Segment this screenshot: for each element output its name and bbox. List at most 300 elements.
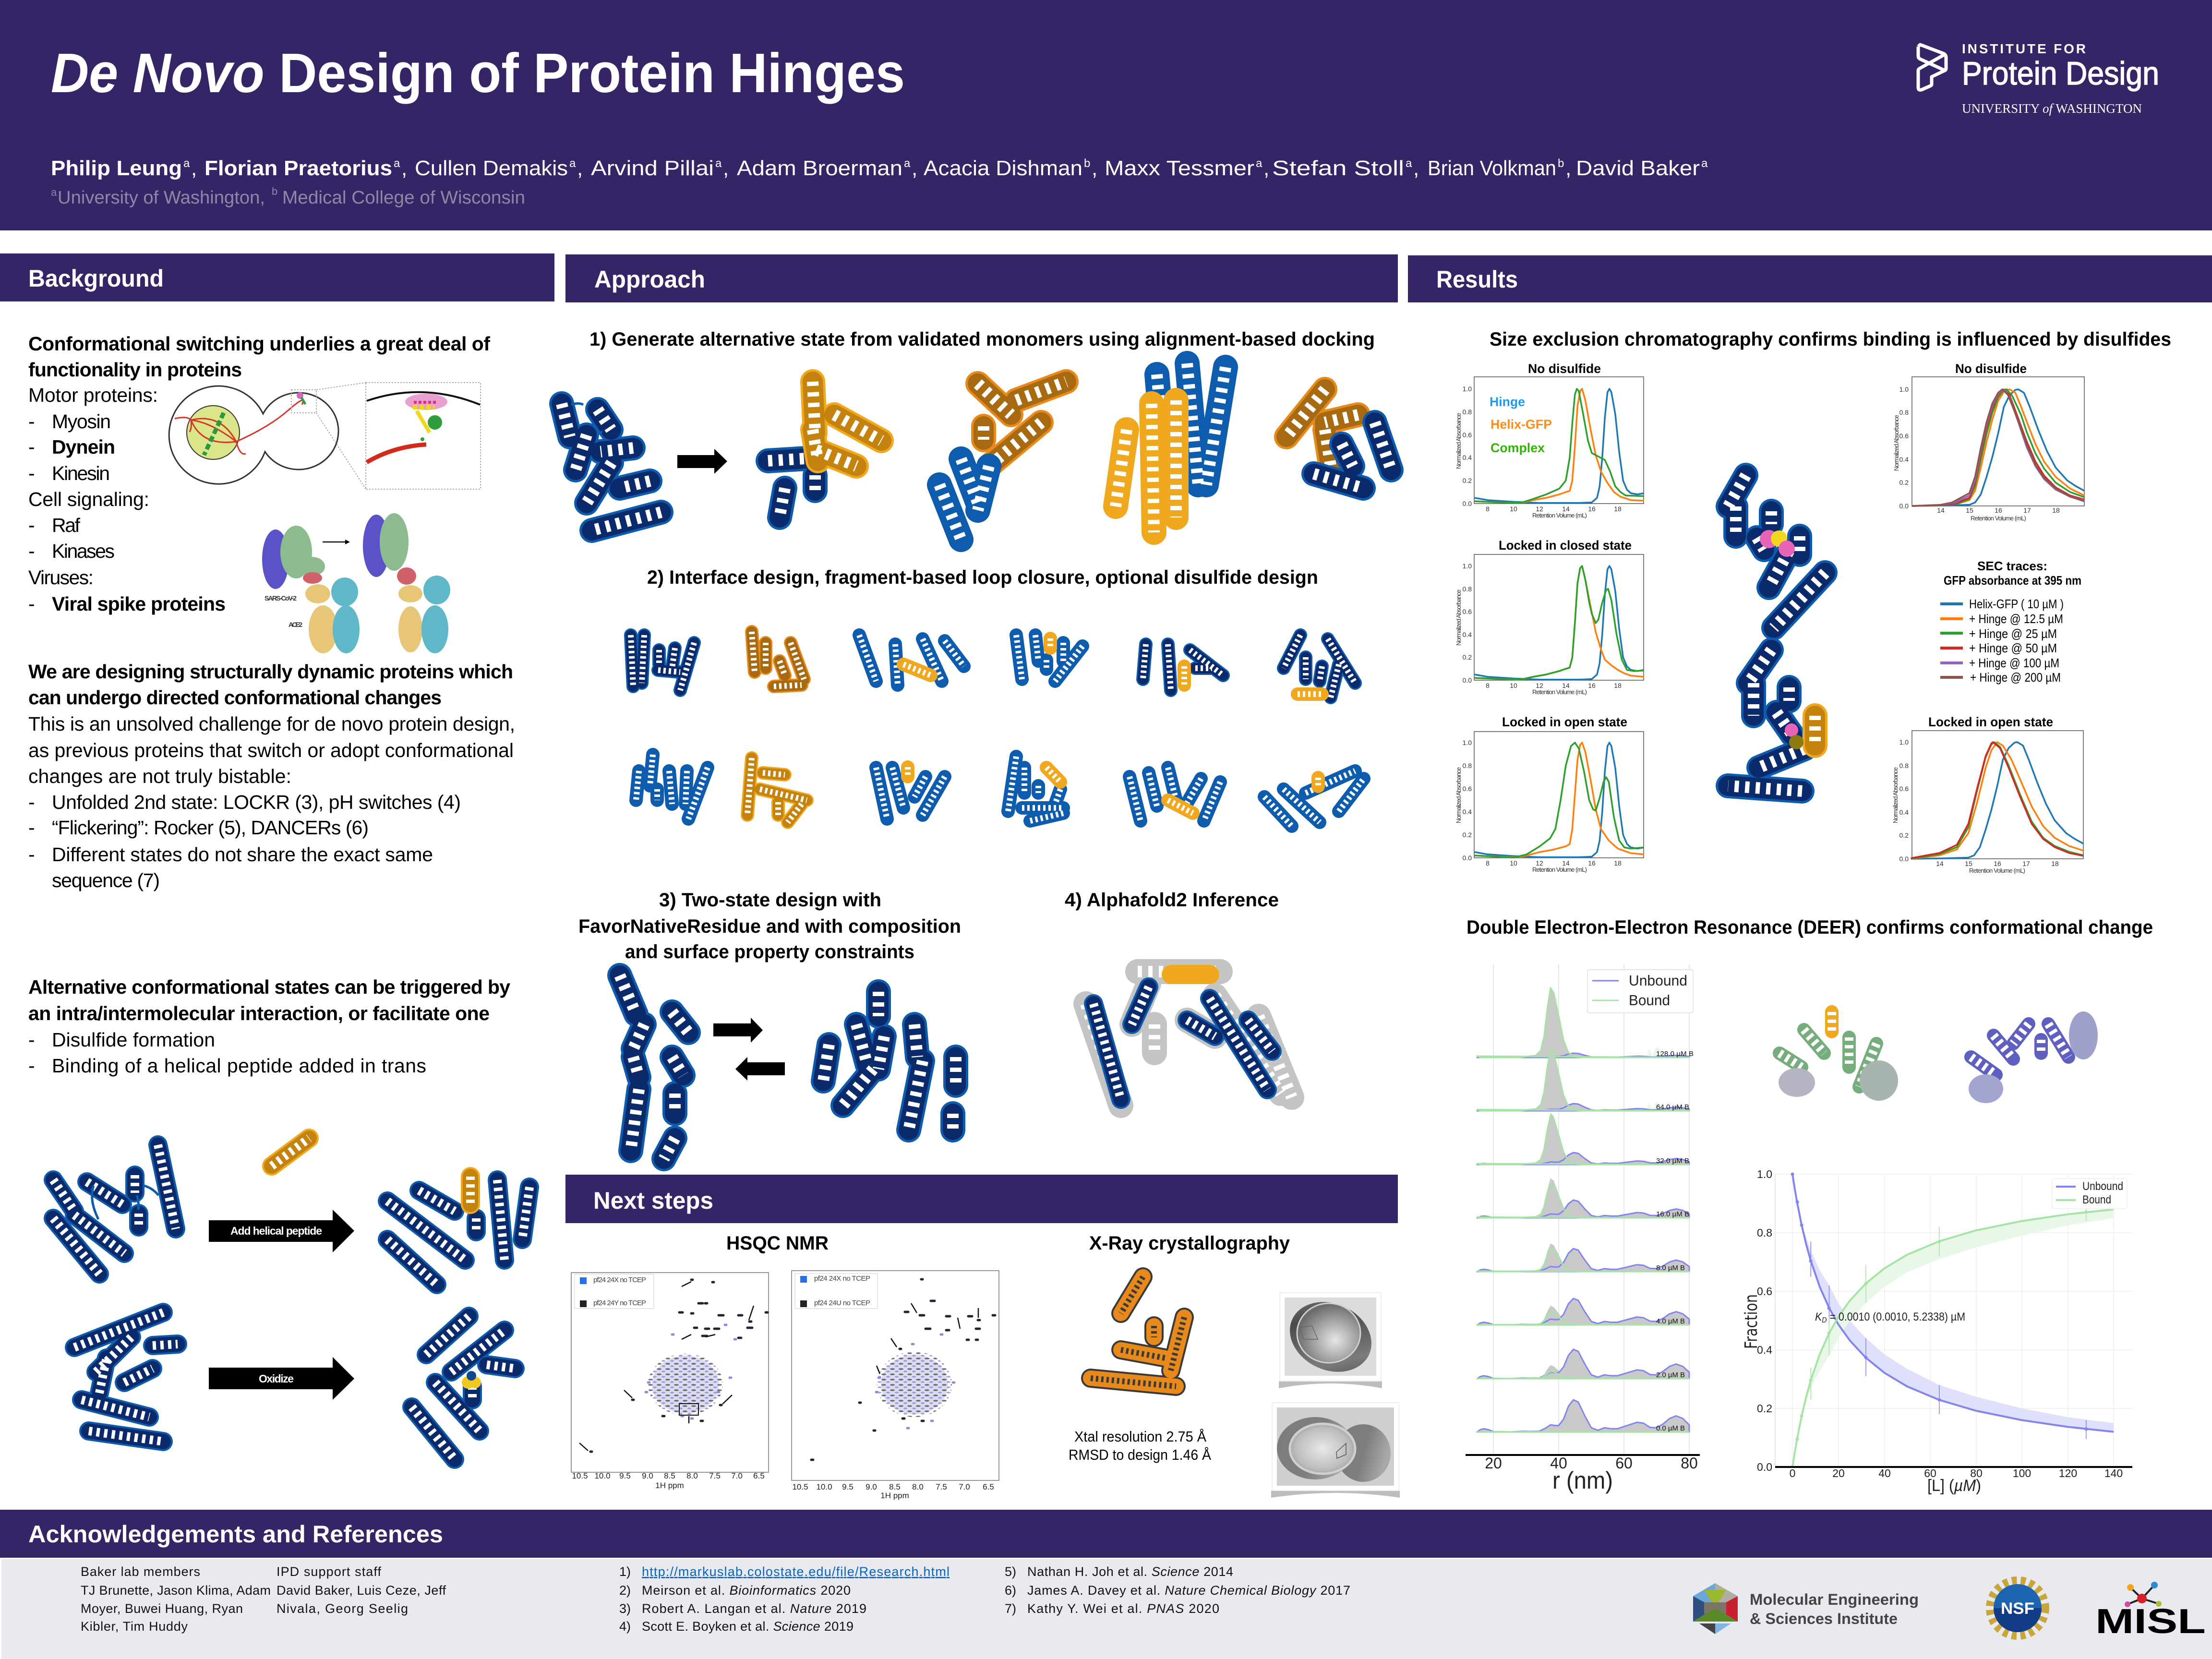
- text: acknowledgements: David Baker, Luis Ceze, Jeff: [276, 1583, 446, 1598]
- heading: step 3: FavorNativeResidue and with composition: [578, 916, 961, 937]
- chart: SEC traces no disulfide: 0.6: [1899, 432, 1909, 440]
- text: references 5-7: 7): [1005, 1601, 1016, 1616]
- text block: alternative conformational states: an intra/intermolecular interaction, or facilitate one: [28, 1002, 490, 1024]
- heading: X-ray crystallography: X-Ray crystallography: [1089, 1233, 1290, 1254]
- authors: b: [1558, 157, 1564, 170]
- logo: Institute for Protein Design: Protein Design: [1962, 55, 2159, 92]
- text block: structurally dynamic proteins: Unfolded 2nd state: LOCKR (3), pH switches (4): [52, 791, 461, 813]
- text block: alternative conformational states: -: [28, 1029, 35, 1051]
- section bar: Results: Results: [1436, 266, 1518, 293]
- chart: HSQC spectrum 1: 7.5: [709, 1471, 721, 1480]
- chart: DEER distance distributions: 40: [1550, 1455, 1567, 1472]
- text block: structurally dynamic proteins: -: [28, 791, 35, 813]
- chart: HSQC spectrum 2: 1H ppm: [880, 1491, 909, 1500]
- chart: SEC locked in open state: Retention Volume (mL): [1532, 866, 1587, 873]
- chart: SEC no disulfide: Retention Volume (mL): [1532, 512, 1587, 519]
- text block: conformational switching: Raf: [52, 514, 81, 536]
- chart: SEC locked in open state: [1455, 715, 1644, 873]
- chart: SEC locked in closed state: Normalized Absorbance: [1455, 589, 1462, 646]
- chart: SEC no disulfide: 14: [1562, 505, 1570, 513]
- chart: binding curve: 0.0: [1757, 1461, 1772, 1473]
- chart: SEC traces locked in open state: Locked in open state: [1928, 715, 2053, 729]
- text: acknowledgements: Nivala, Georg Seelig: [276, 1601, 408, 1616]
- protein row 2: design 11: [1130, 768, 1220, 821]
- chart: SEC no disulfide: 18: [1614, 505, 1622, 513]
- text: references 1-4: 4): [619, 1619, 631, 1634]
- chart: binding curve: 60: [1924, 1467, 1936, 1479]
- authors: ,: [1263, 156, 1269, 180]
- text block: structurally dynamic proteins: can undergo directed conformational changes: [28, 686, 442, 709]
- chart: SEC no disulfide: 10: [1510, 505, 1517, 513]
- protein: closed state: [823, 992, 956, 1130]
- protein row 1: design 6: [1284, 635, 1355, 697]
- section bar: Next steps: [565, 1175, 1398, 1223]
- chart: SEC traces no disulfide: 14: [1937, 506, 1945, 514]
- text: references 5-7: 5): [1005, 1564, 1016, 1579]
- logo: MISL: MISL: [2095, 1602, 2206, 1641]
- figure: dividing cell with dynein inset: [169, 383, 481, 489]
- chart: SEC traces no disulfide: 0.8: [1899, 409, 1909, 416]
- text block: conformational switching: Viral spike proteins: [52, 593, 226, 615]
- heading: DEER: Double Electron-Electron Resonance (DEER) confirms conformational change: [1467, 917, 2153, 938]
- affiliations: [51, 185, 525, 208]
- chart: SEC locked in closed state: 0.8: [1463, 585, 1472, 593]
- legend: SEC traces: SEC traces:: [1977, 559, 2047, 573]
- protein row 1: design 5: [1143, 644, 1223, 690]
- chart: SEC no disulfide: Hinge: [1490, 395, 1525, 409]
- text block: alternative conformational states: Disulfide formation: [52, 1029, 215, 1051]
- protein: peptide bound hinge: [387, 1177, 529, 1285]
- authors: ,: [1092, 156, 1097, 180]
- chart: HSQC spectrum 2: 7.5: [936, 1482, 947, 1491]
- authors: ,: [577, 156, 583, 180]
- logo: NSF: NSF: [2001, 1599, 2034, 1618]
- authors: Brian Volkman: [1428, 156, 1556, 180]
- chart: SEC no disulfide: 8: [1486, 505, 1490, 513]
- chart: HSQC spectrum 1: 8.5: [664, 1471, 675, 1480]
- chart: HSQC spectrum 1: pf24 24Y no TCEP: [593, 1299, 646, 1307]
- text: acknowledgements: IPD support staff: [276, 1564, 381, 1579]
- chart: binding curve: D: [1822, 1316, 1827, 1324]
- chart: DEER distance distributions: 8.0 µM B: [1656, 1264, 1685, 1272]
- chart: HSQC spectrum 1: [571, 1273, 769, 1490]
- text: references 5-7: 6): [1005, 1583, 1016, 1598]
- chart: DEER distance distributions: 2.0 µM B: [1656, 1371, 1685, 1379]
- protein row 1: design 3: [859, 635, 964, 685]
- authors: Philip Leung: [51, 156, 182, 180]
- chart: HSQC spectrum 2: 9.5: [842, 1482, 854, 1491]
- chart: SEC no disulfide: 12: [1536, 505, 1543, 513]
- chart: SEC locked in open state: 1.0: [1463, 739, 1472, 746]
- chart: SEC locked in open state: 0.4: [1463, 808, 1472, 816]
- chart: SEC traces locked in open state: 0.8: [1899, 762, 1909, 769]
- chart: SEC traces no disulfide: 16: [1995, 506, 2002, 514]
- text: references 5-7: Nathan H. Joh et al. Science 2014: [1027, 1564, 1233, 1579]
- chart: SEC locked in open state: Normalized Absorbance: [1455, 767, 1462, 823]
- image: crystal 1: [1278, 1289, 1383, 1388]
- logo: Institute for Protein Design: [1918, 41, 2159, 116]
- text: references 1-4: 3): [619, 1601, 631, 1616]
- protein: oxidized hinge with disulfide: [412, 1316, 515, 1459]
- text: crystal statistics: RMSD to design 1.46 Å: [1069, 1446, 1211, 1463]
- protein: docked 2: [939, 382, 1066, 540]
- text block: conformational switching: -: [28, 593, 35, 615]
- chart: binding curve: 120: [2059, 1467, 2077, 1479]
- section bar: Background: [0, 253, 554, 301]
- chart: SEC traces locked in open state: 0.0: [1899, 855, 1909, 863]
- legend: SEC traces: + Hinge @ 200 µM: [1970, 670, 2061, 685]
- section bar: Approach: Approach: [594, 266, 705, 293]
- chart: SEC traces locked in open state: Retention Volume (mL): [1969, 867, 2025, 874]
- affiliations: b: [272, 185, 277, 197]
- chart: HSQC spectrum 2: 10.5: [792, 1482, 808, 1491]
- chart: SEC locked in open state: 16: [1588, 859, 1596, 867]
- chart: SEC no disulfide: 0.0: [1463, 500, 1472, 507]
- heading: step 3: and surface property constraints: [625, 941, 914, 962]
- protein: unbound state with spin labels: [1969, 1011, 2098, 1103]
- heading: HSQC NMR: HSQC NMR: [726, 1233, 829, 1254]
- authors: ,: [191, 156, 197, 180]
- text: references 1-4: [619, 1564, 950, 1634]
- arrow: back: [735, 1057, 785, 1081]
- chart: SEC locked in open state: 8: [1486, 859, 1490, 867]
- chart: binding curve: 0: [1790, 1467, 1795, 1479]
- arrow: to docked state: [677, 449, 727, 474]
- protein row 1: design 4: [1016, 635, 1082, 681]
- text block: conformational switching: Kinesin: [52, 462, 110, 484]
- chart: DEER distance distributions: Unbound: [1629, 972, 1687, 989]
- text block: alternative conformational states: Alternative conformational states can be triggered by: [28, 976, 510, 998]
- text: references 5-7: Kathy Y. Wei et al. PNAS 2020: [1027, 1601, 1219, 1616]
- chart: SEC traces no disulfide: 1.0: [1899, 385, 1909, 393]
- legend: SEC traces: Helix-GFP ( 10 µM ): [1969, 597, 2064, 611]
- affiliations: University of Washington,: [58, 188, 265, 208]
- chart: SEC locked in closed state: 8: [1486, 682, 1490, 689]
- chart: SEC traces locked in open state: 17: [2022, 860, 2030, 867]
- arrow: oxidize: Oxidize: [259, 1372, 294, 1385]
- legend: SEC traces: + Hinge @ 25 µM: [1969, 626, 2057, 641]
- legend: SEC traces: GFP absorbance at 395 nm: [1944, 573, 2081, 588]
- text block: structurally dynamic proteins: -: [28, 843, 35, 866]
- logo: Institute for Protein Design: INSTITUTE FOR: [1962, 41, 2086, 56]
- chart: SEC locked in open state: 0.0: [1463, 854, 1472, 862]
- chart: HSQC spectrum 1: 9.0: [642, 1471, 653, 1480]
- chart: binding curve: [L] (µM): [1927, 1477, 1981, 1495]
- chart: SEC traces no disulfide: 0.4: [1899, 456, 1909, 463]
- chart: binding curve: Unbound: [2082, 1180, 2123, 1193]
- chart: SEC locked in closed state: [1455, 538, 1644, 696]
- chart: binding curve: 80: [1970, 1467, 1983, 1479]
- text block: structurally dynamic proteins: This is an unsolved challenge for de novo protein design,: [28, 713, 515, 735]
- authors: Cullen Demakis: [415, 156, 568, 180]
- chart: DEER distance distributions: 20: [1485, 1455, 1502, 1472]
- logo: NSF: [1991, 1581, 2044, 1635]
- chart: binding curve: [1742, 1168, 2132, 1495]
- chart: binding curve: = 0.0010 (0.0010, 5.2338) µM: [1827, 1310, 1965, 1323]
- chart: SEC locked in open state: 0.8: [1463, 762, 1472, 769]
- chart: SEC locked in closed state: 0.0: [1463, 676, 1472, 684]
- chart: SEC traces locked in open state: 0.2: [1899, 831, 1909, 839]
- text block: conformational switching: Kinases: [52, 540, 115, 562]
- chart: DEER distance distributions: 64.0 µM B: [1656, 1103, 1689, 1111]
- authors: a: [394, 157, 400, 170]
- chart: binding curve: 20: [1832, 1467, 1845, 1479]
- chart: binding curve: K: [1815, 1310, 1822, 1323]
- text block: structurally dynamic proteins: sequence (7): [52, 869, 160, 891]
- chart: SEC locked in closed state: 0.4: [1463, 631, 1472, 638]
- legend: SEC traces: + Hinge @ 12.5 µM: [1969, 612, 2063, 626]
- chart: SEC locked in closed state: Locked in closed state: [1499, 538, 1632, 553]
- protein: closed hinge with disulfide: [1728, 475, 1825, 628]
- chart: SEC no disulfide: 0.8: [1463, 408, 1472, 416]
- chart: SEC no disulfide: Helix-GFP: [1491, 417, 1552, 432]
- chart: HSQC spectrum 2: 7.0: [959, 1482, 970, 1491]
- chart: SEC locked in open state: 14: [1562, 859, 1570, 867]
- text block: conformational switching: -: [28, 410, 35, 433]
- heading: step 3: [578, 890, 961, 962]
- chart: HSQC spectrum 2: 8.5: [889, 1482, 901, 1491]
- protein: open state: [620, 975, 688, 1159]
- authors: Adam Broerman: [737, 156, 902, 180]
- text: acknowledgements: TJ Brunette, Jason Klima, Adam: [81, 1583, 271, 1598]
- chart: SEC traces locked in open state: [1892, 715, 2083, 874]
- chart: SEC locked in open state: 0.2: [1463, 831, 1472, 839]
- image: crystal 2: [1271, 1403, 1400, 1498]
- heading: step 3: 3) Two-state design with: [659, 890, 881, 911]
- authors: Stefan Stoll: [1272, 156, 1404, 180]
- authors: Arvind Pillai: [591, 156, 714, 180]
- text: references 1-4: 2): [619, 1583, 631, 1598]
- text: crystal statistics: [1069, 1428, 1211, 1463]
- section bar: Acknowledgements and References: Acknowledgements and References: [28, 1521, 443, 1548]
- authors: Acacia Dishman: [924, 156, 1082, 180]
- chart: HSQC spectrum 1: 6.5: [753, 1471, 765, 1480]
- text: acknowledgements: Baker lab members: [81, 1564, 200, 1579]
- text block: structurally dynamic proteins: -: [28, 817, 35, 839]
- heading: step 1: 1) Generate alternative state from validated monomers using alignment-based docking: [589, 329, 1375, 350]
- authors: ,: [1413, 156, 1419, 180]
- chart: SEC locked in open state: 0.6: [1463, 785, 1472, 793]
- chart: SEC traces no disulfide: 18: [2052, 506, 2060, 514]
- chart: SEC traces locked in open state: 15: [1965, 860, 1972, 867]
- protein row 2: design 8: [747, 758, 807, 822]
- chart: SEC locked in closed state: 14: [1562, 682, 1570, 689]
- text: references 5-7: James A. Davey et al. Nature Chemical Biology 2017: [1027, 1583, 1350, 1598]
- protein: open hinge with peptide: [1728, 650, 1815, 791]
- protein: reduced hinge: [74, 1312, 178, 1442]
- title: De Novo Design of Protein Hinges: [51, 42, 905, 104]
- legend: SEC traces: [1940, 559, 2081, 685]
- authors: a: [904, 157, 911, 170]
- text block: conformational switching: functionality in proteins: [28, 359, 242, 381]
- chart: SEC no disulfide: [1455, 361, 1644, 519]
- chart: SEC no disulfide: 0.6: [1463, 431, 1472, 439]
- chart: HSQC spectrum 2: pf24 24X no TCEP: [814, 1274, 870, 1283]
- chart: SEC locked in open state: Locked in open state: [1502, 715, 1627, 729]
- protein row 2: design 7: [636, 755, 708, 819]
- authors: ,: [723, 156, 729, 180]
- chart: binding curve: Fraction: [1742, 1294, 1761, 1349]
- protein row 2: design 10: [1008, 757, 1063, 821]
- authors: a: [715, 157, 722, 170]
- chart: SEC locked in closed state: 0.2: [1463, 653, 1472, 661]
- text: references 1-4: Scott E. Boyken et al. Science 2019: [642, 1619, 854, 1634]
- text: crystal statistics: Xtal resolution 2.75 Å: [1074, 1428, 1206, 1445]
- text: references 1-4: http://markuslab.colostate.edu/file/Research.html: [642, 1564, 950, 1579]
- authors: b: [1084, 157, 1090, 170]
- chart: binding curve: 0.8: [1757, 1226, 1772, 1239]
- text block: structurally dynamic proteins: changes are not truly bistable:: [28, 765, 291, 787]
- protein: monomer: [562, 403, 661, 530]
- authors: David Baker: [1576, 156, 1700, 180]
- chart: DEER distance distributions: r (nm): [1552, 1467, 1613, 1494]
- protein: docked 1: [768, 382, 881, 517]
- chart: DEER distance distributions: 16.0 µM B: [1656, 1210, 1689, 1218]
- section bar: Approach: [565, 254, 1398, 302]
- chart: DEER distance distributions: 4.0 µM B: [1656, 1317, 1685, 1325]
- arrow: forward: [713, 1018, 763, 1043]
- text block: structurally dynamic proteins: “Flickering”: Rocker (5), DANCERs (6): [52, 817, 369, 839]
- chart: SEC traces no disulfide: Normalized Absorbance: [1893, 415, 1900, 471]
- chart: HSQC spectrum 1: 1H ppm: [655, 1481, 684, 1490]
- chart: SEC locked in closed state: 16: [1588, 682, 1596, 689]
- chart: HSQC spectrum 1: pf24 24X no TCEP: [593, 1276, 646, 1284]
- figure: SARS-CoV-2 spike and ACE2: [262, 513, 450, 653]
- text block: structurally dynamic proteins: as previous proteins that switch or adopt conformational: [28, 739, 514, 761]
- authors: a: [183, 157, 190, 170]
- chart: SEC locked in open state: 18: [1614, 859, 1622, 867]
- chart: SEC locked in closed state: 1.0: [1463, 562, 1472, 570]
- chart: SEC traces no disulfide: 15: [1966, 506, 1973, 514]
- chart: SEC traces locked in open state: 18: [2051, 860, 2059, 867]
- protein row 1: design 1: [631, 635, 694, 690]
- authors: a: [569, 157, 576, 170]
- chart: binding curve: 0.2: [1757, 1402, 1772, 1415]
- chart: SEC locked in closed state: 18: [1614, 682, 1622, 689]
- arrow: add helical peptide: Add helical peptide: [230, 1225, 322, 1237]
- chart: SEC locked in closed state: 12: [1536, 682, 1543, 689]
- chart: binding curve: 0.6: [1757, 1285, 1772, 1298]
- authors: ,: [401, 156, 407, 180]
- text block: conformational switching: -: [28, 462, 35, 484]
- text block: alternative conformational states: -: [28, 1055, 35, 1077]
- text: acknowledgements: Moyer, Buwei Huang, Ryan: [81, 1601, 243, 1616]
- chart: SEC no disulfide: 16: [1588, 505, 1596, 513]
- legend: SEC traces: + Hinge @ 50 µM: [1969, 641, 2057, 655]
- chart: SEC traces no disulfide: Retention Volume (mL): [1971, 515, 2026, 522]
- chart: SEC traces locked in open state: 0.4: [1899, 808, 1909, 816]
- chart: HSQC spectrum 1: 10.5: [572, 1471, 588, 1480]
- text block: conformational switching: Motor proteins:: [28, 384, 158, 406]
- chart: DEER distance distributions: [1466, 964, 1700, 1494]
- chart: DEER distance distributions: Bound: [1629, 992, 1670, 1009]
- chart: SEC no disulfide: Complex: [1491, 441, 1545, 455]
- legend: SEC traces: + Hinge @ 100 µM: [1969, 656, 2059, 670]
- chart: SEC no disulfide: 1.0: [1463, 385, 1472, 393]
- chart: HSQC spectrum 2: 9.0: [866, 1482, 877, 1491]
- chart: SEC traces locked in open state: 0.6: [1899, 785, 1909, 793]
- arrow: oxidize: [209, 1357, 354, 1400]
- figure: SARS-CoV-2 spike and ACE2: SARS-CoV-2: [264, 594, 297, 602]
- protein: docked 4: [1286, 389, 1391, 488]
- chart: HSQC spectrum 1: 9.5: [619, 1471, 631, 1480]
- logo: MISL: [2095, 1582, 2206, 1641]
- protein: docked 3: [1116, 363, 1226, 532]
- text: references 1-4: Meirson et al. Bioinformatics 2020: [642, 1583, 851, 1598]
- text block: conformational switching: Viruses:: [28, 566, 94, 589]
- chart: HSQC spectrum 2: 10.0: [816, 1482, 832, 1491]
- authors: a: [1701, 157, 1708, 170]
- text block: alternative conformational states: [28, 976, 510, 1077]
- chart: SEC no disulfide: Normalized Absorbance: [1455, 413, 1462, 469]
- protein: Alphafold2 overlay: [1086, 972, 1292, 1106]
- logo: Molecular Engineering & Sciences Institute: Molecular Engineering: [1750, 1591, 1919, 1608]
- chart: binding curve: Bound: [2082, 1193, 2111, 1206]
- footer panel: [1, 1559, 2212, 1659]
- chart: binding curve: 1.0: [1757, 1168, 1772, 1180]
- protein: helical peptide: [272, 1138, 309, 1166]
- protein row 1: design 2: [752, 632, 804, 686]
- arrow: add helical peptide: [209, 1210, 354, 1252]
- text: acknowledgements: Kibler, Tim Huddy: [81, 1619, 188, 1634]
- protein row 2: design 12: [1264, 771, 1364, 826]
- heading: size exclusion chromatography: Size exclusion chromatography confirms binding is influenced by disulfides: [1490, 329, 2171, 350]
- chart: DEER distance distributions: 60: [1615, 1455, 1633, 1472]
- affiliations: a: [51, 186, 57, 198]
- logo: Institute for Protein Design: UNIVERSITY of WASHINGTON: [1962, 101, 2142, 116]
- protein: open hinge: [53, 1145, 176, 1274]
- section bar: Next steps: Next steps: [593, 1187, 713, 1214]
- chart: SEC locked in open state: 12: [1536, 859, 1543, 867]
- authors: [51, 156, 1708, 180]
- text: references 1-4: Robert A. Langan et al. Nature 2019: [642, 1601, 866, 1616]
- section bar: Background: Background: [28, 265, 164, 292]
- section bar: Acknowledgements and References: [0, 1510, 2212, 1558]
- text block: alternative conformational states: Binding of a helical peptide added in trans: [52, 1055, 426, 1077]
- text block: conformational switching: Conformational switching underlies a great deal of: [28, 333, 490, 355]
- text: references 1-4: 1): [619, 1564, 631, 1579]
- affiliations: Medical College of Wisconsin: [282, 188, 525, 208]
- chart: SEC traces locked in open state: 16: [1994, 860, 2001, 867]
- authors: Florian Praetorius: [204, 156, 392, 180]
- chart: HSQC spectrum 2: 8.0: [912, 1482, 924, 1491]
- chart: DEER distance distributions: 80: [1681, 1455, 1698, 1472]
- chart: HSQC spectrum 2: [792, 1271, 999, 1500]
- chart: HSQC spectrum 2: 6.5: [983, 1482, 994, 1491]
- chart: SEC locked in closed state: Retention Volume (mL): [1532, 688, 1587, 696]
- chart: SEC traces no disulfide: 0.2: [1899, 479, 1909, 486]
- text block: structurally dynamic proteins: [28, 661, 515, 891]
- authors: ,: [1565, 156, 1571, 180]
- chart: SEC no disulfide: 0.4: [1463, 454, 1472, 461]
- chart: SEC traces no disulfide: 17: [2023, 506, 2031, 514]
- text block: conformational switching: -: [28, 436, 35, 458]
- authors: Maxx Tessmer: [1105, 156, 1254, 180]
- chart: SEC locked in open state: 10: [1510, 859, 1517, 867]
- text block: conformational switching: -: [28, 514, 35, 536]
- authors: ,: [912, 156, 917, 180]
- header banner: [0, 0, 2212, 230]
- chart: SEC traces no disulfide: 0.0: [1899, 502, 1909, 510]
- chart: DEER distance distributions: 32.0 µM B: [1656, 1157, 1689, 1165]
- heading: step 4: 4) Alphafold2 Inference: [1065, 890, 1279, 911]
- chart: DEER distance distributions: 0.0 µM B: [1656, 1424, 1685, 1432]
- chart: HSQC spectrum 1: 10.0: [594, 1471, 611, 1480]
- chart: SEC traces no disulfide: No disulfide: [1955, 361, 2027, 376]
- text: references 5-7: [1005, 1564, 1350, 1616]
- chart: SEC locked in closed state: 0.6: [1463, 608, 1472, 615]
- text block: conformational switching: [28, 333, 490, 615]
